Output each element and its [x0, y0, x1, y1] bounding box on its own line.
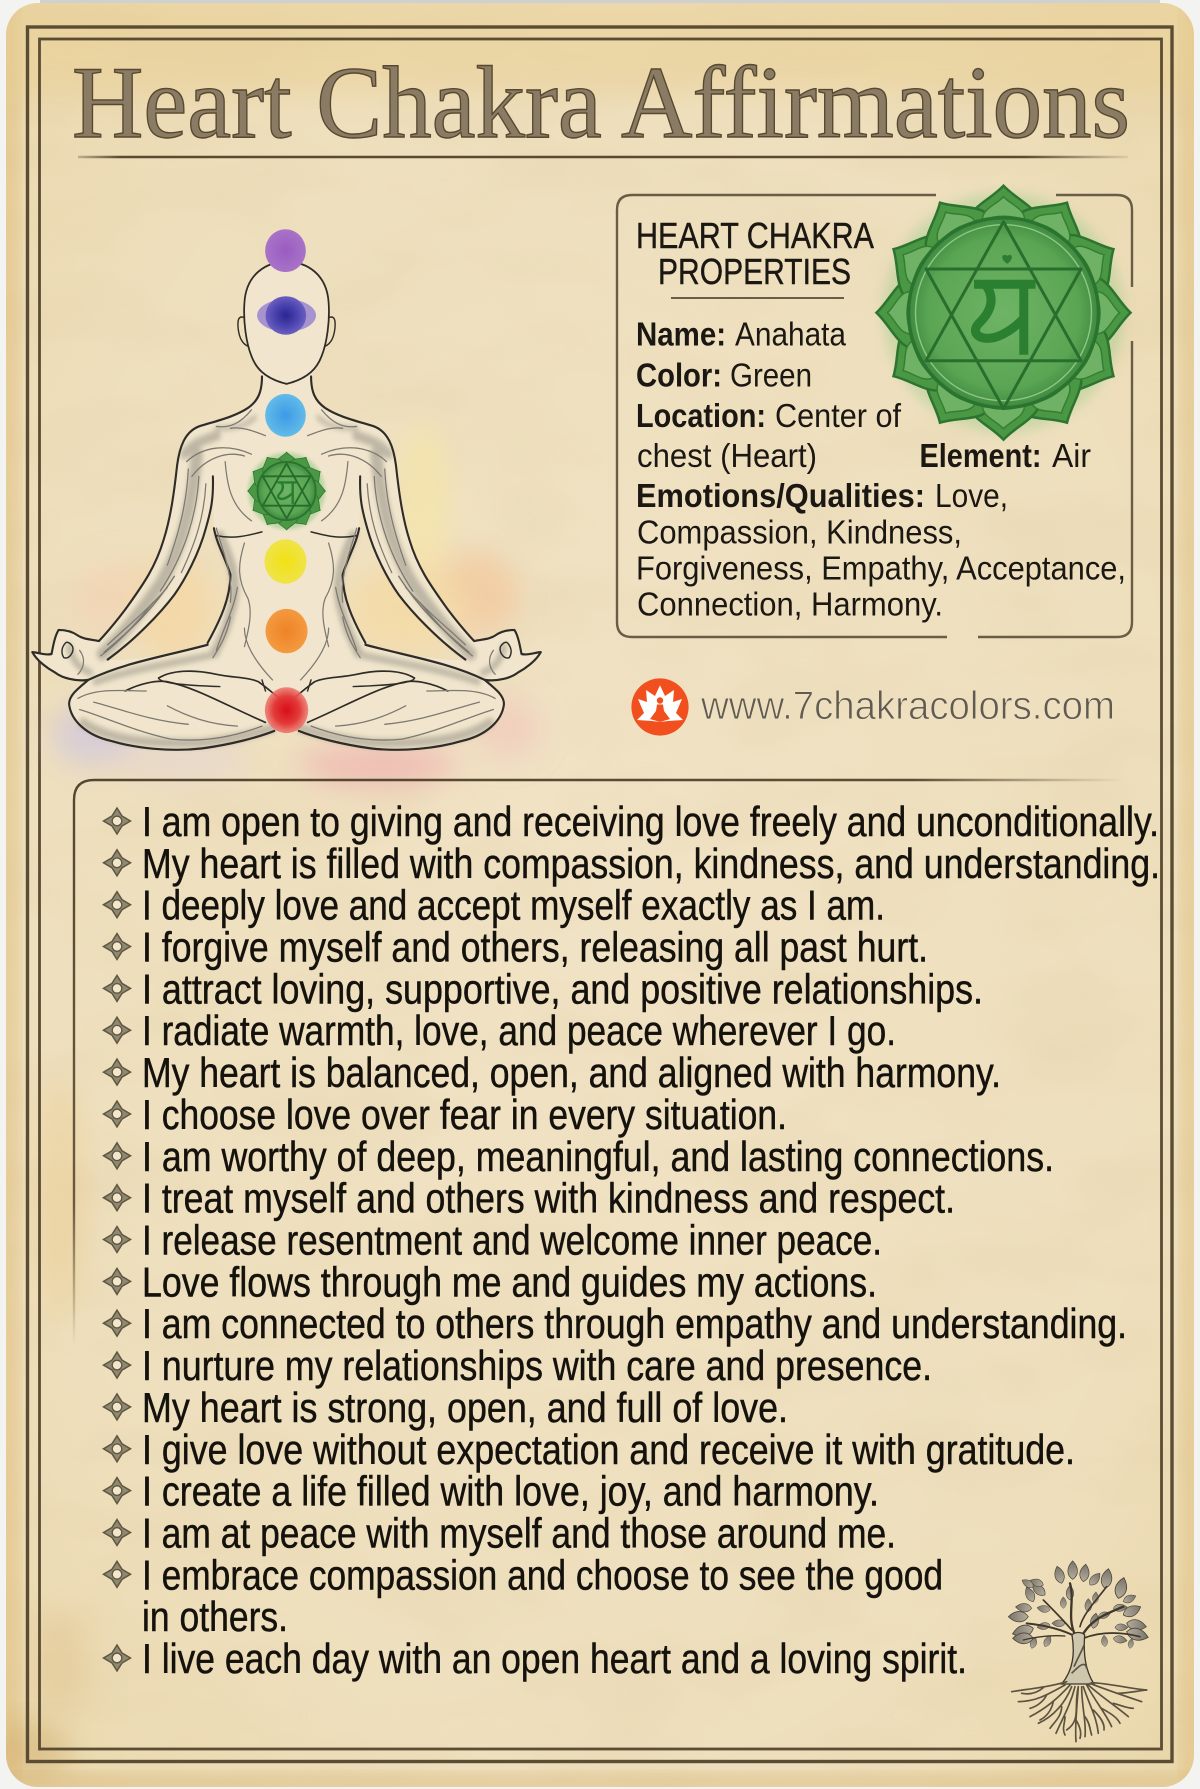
property: emotions and qualities	[636, 478, 1126, 624]
icon: tree of life	[1008, 1561, 1150, 1742]
icon: logo	[631, 678, 689, 736]
title: Heart Chakra Affirmations	[72, 46, 1130, 160]
affirmation 15: My heart is strong, open, and full of love.	[142, 1384, 788, 1431]
affirmation 7: My heart is balanced, open, and aligned with harmony.	[142, 1049, 1001, 1096]
solar plexus chakra	[264, 539, 307, 584]
tree roots	[1012, 1682, 1147, 1742]
third eye chakra	[257, 296, 316, 335]
property: emotions and qualities: Forgiveness, Empathy, Acceptance,	[636, 550, 1126, 588]
tree trunk	[1062, 1632, 1094, 1684]
affirmation 17: I create a life filled with love, joy, and harmony.	[142, 1468, 879, 1515]
affirmation 9: I am worthy of deep, meaningful, and lasting connections.	[142, 1133, 1054, 1180]
affirmation 12: Love flows through me and guides my actions.	[142, 1258, 877, 1305]
property: location: chest (Heart)	[637, 438, 817, 475]
property: name: Name:	[636, 316, 726, 354]
affirmation 19: I embrace compassion and choose to see the good	[142, 1551, 943, 1598]
property: color: Color:	[636, 358, 722, 394]
panel: heart chakra properties	[617, 195, 1132, 637]
property: emotions and qualities: Love,	[935, 478, 1008, 515]
affirmation 3: I deeply love and accept myself exactly as I am.	[142, 882, 885, 929]
property: name: Anahata	[735, 316, 846, 354]
website URL: www.7chakracolors.com	[700, 684, 1115, 728]
icon: heart chakra mandala	[875, 184, 1132, 441]
affirmation 10: I treat myself and others with kindness and respect.	[142, 1175, 955, 1222]
root chakra	[265, 687, 308, 733]
panel heading	[636, 215, 874, 292]
property: location: Center of	[775, 398, 902, 435]
property: emotions and qualities: Connection, Harmony.	[637, 586, 943, 624]
small heart chakra mandala	[247, 452, 326, 530]
throat chakra	[265, 394, 306, 437]
affirmation 19: in others.	[142, 1593, 288, 1640]
property: emotions and qualities: Compassion, Kindness,	[637, 514, 962, 552]
property: location	[636, 398, 902, 475]
body line drawing	[32, 229, 541, 750]
affirmation 8: I choose love over fear in every situation.	[142, 1091, 787, 1138]
sacral chakra	[265, 609, 308, 653]
panel: affirmations list	[74, 780, 1160, 1682]
watercolor wash	[52, 425, 543, 785]
property: element: Element:	[920, 438, 1042, 475]
property: name	[636, 316, 846, 354]
affirmation 11: I release resentment and welcome inner peace.	[142, 1216, 882, 1264]
property: element: Air	[1052, 438, 1091, 475]
property: color: Green	[730, 358, 812, 394]
top shadow strip	[40, 0, 1160, 3]
panel heading: PROPERTIES	[658, 251, 851, 292]
panel outline	[617, 195, 1132, 637]
affirmation 6: I radiate warmth, love, and peace wherever I go.	[142, 1007, 896, 1054]
list panel outline	[74, 780, 1124, 1345]
property: location: Location:	[636, 398, 766, 435]
affirmation 14: I nurture my relationships with care and presence.	[142, 1342, 932, 1389]
affirmation 20: I live each day with an open heart and a loving spirit.	[142, 1635, 967, 1682]
crown chakra	[265, 229, 306, 272]
affirmation 4: I forgive myself and others, releasing all past hurt.	[142, 924, 928, 970]
property: color	[636, 358, 812, 394]
panel heading: HEART CHAKRA	[636, 215, 874, 256]
tree leaves	[1008, 1561, 1150, 1649]
affirmation 5: I attract loving, supportive, and positive relationships.	[142, 965, 983, 1012]
affirmation 19	[104, 1551, 943, 1640]
affirmation 18: I am at peace with myself and those around me.	[142, 1510, 896, 1556]
website logo and URL	[631, 678, 1115, 736]
tree branches	[1023, 1583, 1140, 1640]
illustration: meditating figure with chakras	[32, 229, 543, 785]
property: emotions and qualities: Emotions/Qualities:	[636, 478, 925, 515]
